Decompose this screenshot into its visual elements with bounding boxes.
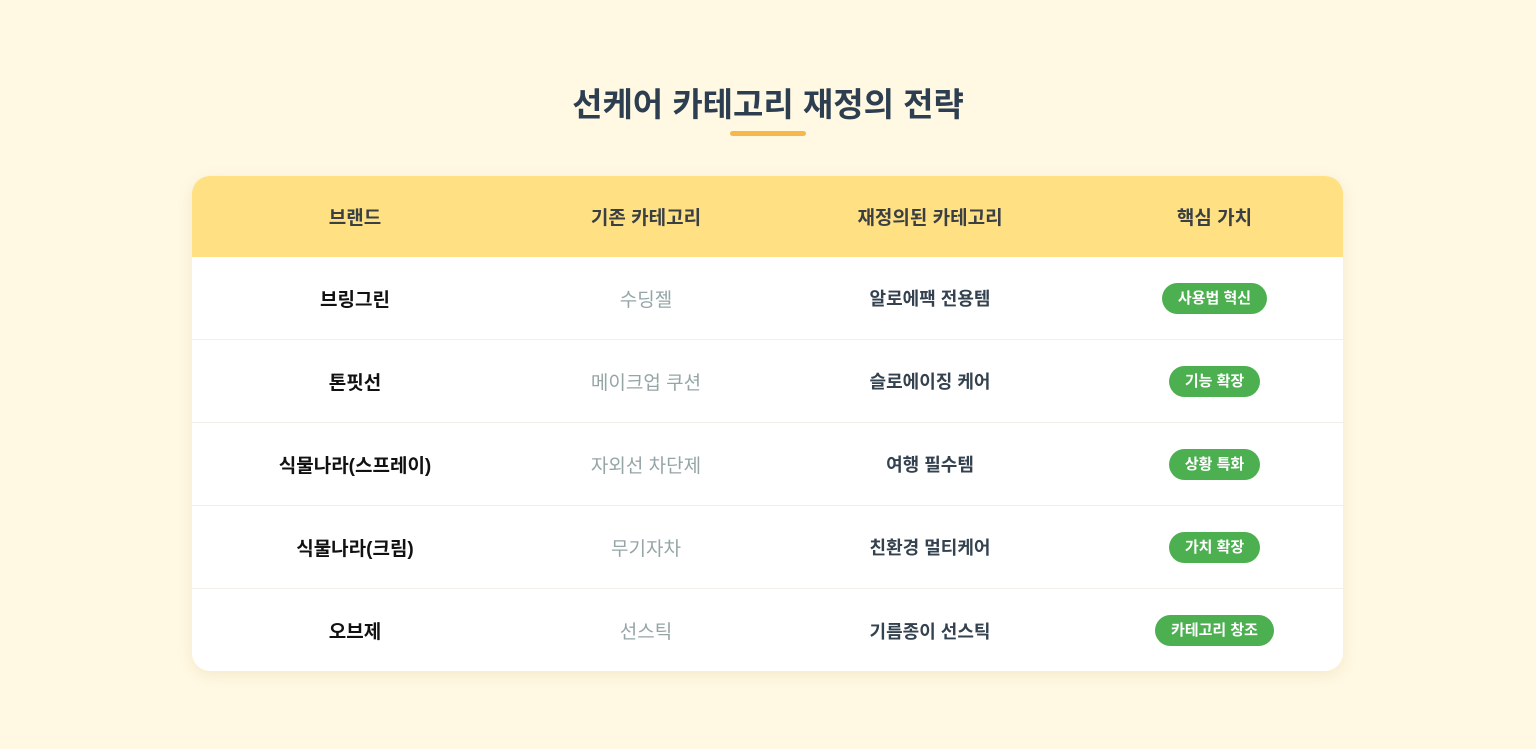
row: 식물나라 크림: 친환경 멀티케어	[870, 538, 990, 558]
row: 오브제: 카테고리 창조	[1171, 622, 1258, 639]
title underline	[730, 131, 806, 136]
row: 식물나라 스프레이: 자외선 차단제	[591, 456, 701, 476]
row: 브링그린: 브링그린	[320, 290, 390, 310]
row: 브링그린: 알로에팩 전용템	[870, 289, 990, 309]
row: 톤핏선	[192, 340, 1343, 423]
table	[192, 176, 1343, 671]
title: 선케어 카테고리 재정의 전략	[572, 86, 964, 123]
header row: 브랜드	[329, 208, 381, 229]
row: 톤핏선: 메이크업 쿠션	[591, 372, 701, 394]
header row	[192, 176, 1343, 257]
row: 식물나라 크림	[192, 506, 1343, 589]
row: 톤핏선: 톤핏선	[329, 372, 381, 394]
row: 브링그린	[192, 257, 1343, 340]
row: 식물나라 스프레이: 식물나라(스프레이)	[279, 456, 431, 476]
row: 식물나라 크림: 식물나라(크림)	[296, 538, 414, 560]
row: 식물나라 크림: 무기자차	[611, 538, 681, 560]
row: 브링그린: 수딩젤	[620, 290, 672, 310]
row: 오브제: 오브제	[329, 622, 381, 643]
row: 오브제	[329, 615, 1274, 646]
row: 식물나라 크림: 가치 확장	[1185, 538, 1244, 556]
header row: 기존 카테고리	[591, 208, 701, 229]
row: 오브제: 기름종이 선스틱	[870, 622, 990, 642]
row: 오브제: 선스틱	[620, 622, 672, 643]
row: 식물나라 스프레이: 여행 필수템	[886, 455, 974, 475]
row: 식물나라 스프레이: 상황 특화	[1185, 456, 1244, 472]
row: 브링그린: 사용법 혁신	[1178, 290, 1251, 306]
row: 톤핏선: 기능 확장	[1185, 372, 1244, 390]
row: 식물나라 스프레이	[192, 423, 1343, 506]
header row: 재정의된 카테고리	[857, 208, 1003, 229]
row: 톤핏선: 슬로에이징 케어	[870, 372, 990, 392]
header row: 핵심 가치	[1177, 208, 1252, 229]
